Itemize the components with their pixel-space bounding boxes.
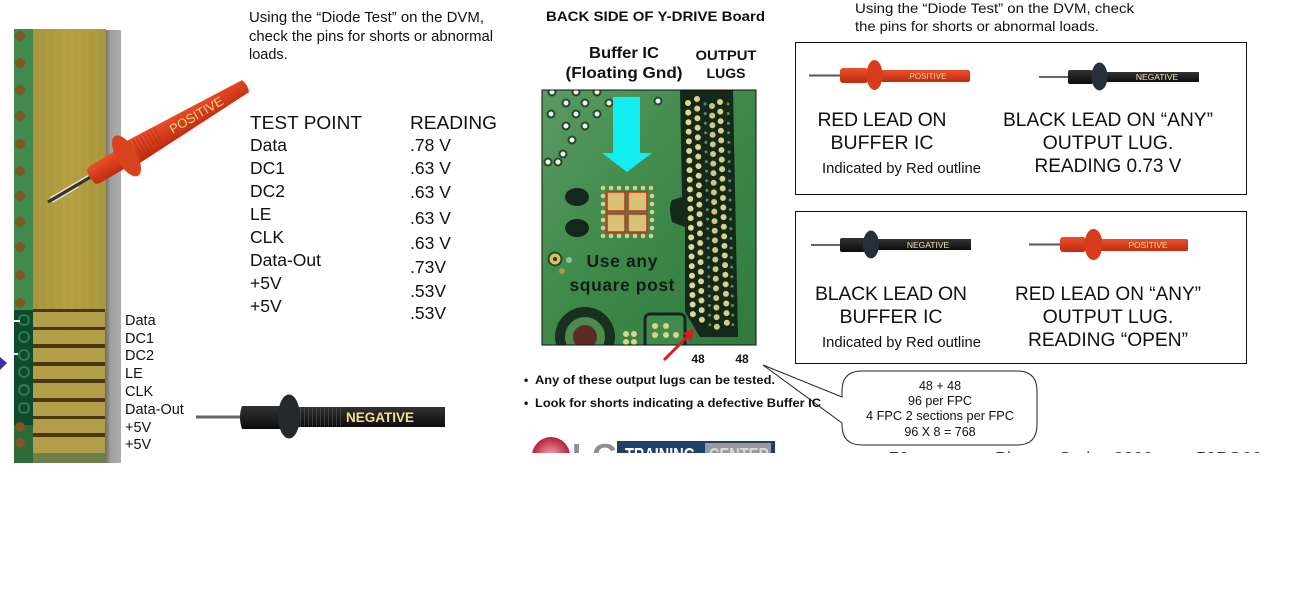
icon: large positive probe [36, 66, 258, 222]
instructions text: loads. [249, 47, 288, 63]
test point table: .63 V [410, 233, 451, 253]
output connector [670, 90, 738, 337]
use any square post label: square post [570, 275, 675, 295]
pin labels: CLK [125, 384, 154, 400]
icon: small blue arrow at edge [0, 357, 7, 370]
panel: red on buffer [796, 42, 1246, 194]
left caption: Indicated by Red outline [822, 161, 981, 177]
test point table: Data [250, 135, 287, 155]
output lugs heading: OUTPUT [696, 47, 757, 63]
right caption: READING 0.73 V [1034, 155, 1182, 177]
panel: black on buffer [796, 212, 1246, 364]
callout [763, 365, 1037, 445]
bullet notes: • [524, 396, 528, 410]
left caption: BLACK LEAD ON [815, 283, 967, 305]
right caption [1015, 283, 1201, 351]
icon: large negative probe: NEGATIVE [346, 410, 414, 425]
test point table: CLK [250, 227, 284, 247]
middle heading: BACK SIDE OF Y-DRIVE Board [546, 8, 765, 24]
clipped footer logo and caption [532, 437, 1260, 453]
test point table: DC2 [250, 181, 285, 201]
pin labels: LE [125, 366, 143, 382]
bullet notes [524, 373, 821, 410]
via ring [603, 188, 652, 236]
icon: large negative probe [196, 394, 445, 438]
icon: red probe: POSITIVE [910, 72, 946, 81]
test point table: LE [250, 204, 271, 224]
test point table: READING [410, 112, 497, 133]
icon: black probe: NEGATIVE [1136, 72, 1179, 82]
buffer IC heading: Buffer IC [589, 45, 659, 62]
right caption: READING “OPEN” [1028, 329, 1188, 351]
pin labels: +5V [125, 437, 152, 453]
icon: red probe: POSITIVE [1128, 240, 1168, 250]
test point table [250, 112, 497, 323]
icon: black probe: NEGATIVE [907, 240, 950, 250]
test point table: .63 V [410, 208, 451, 228]
dark oval pads [565, 188, 589, 206]
lug counts: 48 [691, 352, 705, 366]
board border [542, 90, 756, 345]
instructions text: check the pins for shorts or abnormal [249, 29, 493, 45]
left caption: BUFFER IC [840, 306, 942, 328]
left caption [818, 109, 981, 177]
icon: red probe [809, 60, 970, 90]
test point table: .53V [410, 303, 446, 323]
test point table: DC1 [250, 158, 285, 178]
pin labels: Data-Out [125, 402, 184, 418]
top right instructions [855, 0, 1135, 34]
gold via [548, 252, 562, 266]
bullet notes: Look for shorts indicating a defective Buffer IC [535, 396, 821, 410]
test point table: .63 V [410, 158, 451, 178]
left caption [815, 283, 981, 351]
callout: 96 X 8 = 768 [904, 425, 976, 439]
test point table: +5V [250, 273, 282, 293]
right caption: BLACK LEAD ON “ANY” [1003, 109, 1213, 131]
test point table: TEST POINT [250, 112, 362, 133]
output lugs heading: LUGS [707, 65, 745, 81]
red arrow [664, 329, 695, 360]
buffer IC square posts [607, 192, 647, 232]
callout: 48 + 48 [919, 379, 961, 393]
buffer IC heading: (Floating Gnd) [566, 65, 682, 82]
right caption [1003, 109, 1213, 177]
left caption: BUFFER IC [831, 132, 933, 154]
buffer IC heading [566, 45, 682, 82]
lug counts: 48 [735, 352, 749, 366]
pin labels: Data [125, 313, 157, 329]
test point table: Data-Out [250, 250, 321, 270]
right caption: OUTPUT LUG. [1043, 132, 1173, 154]
clipped footer logo and caption: Plasma Series 2009 [995, 449, 1153, 469]
small vias cluster [544, 88, 662, 166]
large mounting hole [555, 307, 615, 344]
top right instructions: the pins for shorts or abnormal loads. [855, 18, 1099, 34]
test point table: +5V [250, 296, 282, 316]
infographic canvas [0, 3, 1260, 463]
icon: black probe [811, 230, 971, 258]
use any square post label: Use any [586, 251, 658, 271]
test point table: .73V [410, 257, 446, 277]
Y-drive board photo [542, 88, 756, 367]
left caption: Indicated by Red outline [822, 335, 981, 351]
left board photo [14, 29, 121, 463]
clipped footer logo and caption: 70 [889, 449, 909, 469]
callout: 96 per FPC [908, 394, 972, 408]
bullet notes: • [524, 373, 528, 387]
pin labels: DC1 [125, 331, 154, 347]
lug counts [691, 352, 749, 366]
cyan arrow [602, 97, 652, 172]
icon: red probe [1029, 229, 1188, 260]
instructions text [249, 10, 493, 63]
use any square post label [570, 251, 675, 295]
right caption: OUTPUT LUG. [1043, 306, 1173, 328]
test point table: .78 V [410, 135, 451, 155]
lower connector window [645, 314, 685, 348]
left caption: RED LEAD ON [818, 109, 946, 131]
clipped footer logo and caption: LG [572, 437, 618, 474]
bullet notes: Any of these output lugs can be tested. [535, 373, 775, 387]
clipped footer logo and caption: 50PG30 [1196, 449, 1262, 469]
pin labels: +5V [125, 420, 152, 436]
pin labels: DC2 [125, 348, 154, 364]
clipped footer logo and caption: TRAINING [625, 445, 695, 465]
icon: large positive probe: POSITIVE [167, 93, 226, 137]
test point table: .53V [410, 281, 446, 301]
test point table: .63 V [410, 182, 451, 202]
output lugs heading [696, 47, 757, 81]
top right instructions: Using the “Diode Test” on the DVM, check [855, 0, 1135, 16]
right caption: RED LEAD ON “ANY” [1015, 283, 1201, 305]
icon: black probe [1039, 62, 1199, 90]
callout: 4 FPC 2 sections per FPC [866, 409, 1014, 423]
clipped footer logo and caption: CENTER [709, 445, 769, 465]
pin labels [125, 313, 184, 453]
instructions text: Using the “Diode Test” on the DVM, [249, 10, 484, 26]
